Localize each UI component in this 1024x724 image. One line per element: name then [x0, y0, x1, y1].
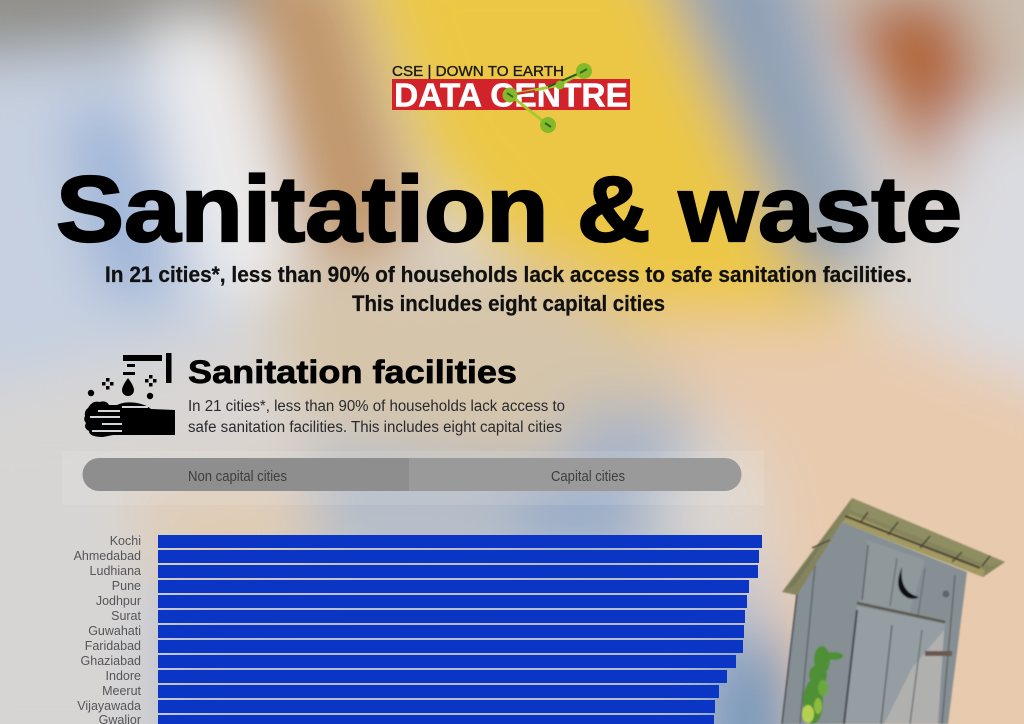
legend: capital cities: Capital cities: [551, 468, 625, 485]
legend: capital cities: [409, 458, 742, 491]
city labels: Ahmedabad: [74, 549, 141, 563]
section description: [188, 398, 565, 436]
bar chart: households with safe sanitation by city: [74, 534, 762, 724]
city labels: Meerut: [102, 684, 142, 698]
logo top line: CSE | DOWN TO EARTH: [392, 63, 564, 80]
knot holes: [942, 590, 950, 598]
logo red banner: [392, 79, 630, 110]
bars: [158, 535, 762, 724]
city labels: Guwahati: [88, 624, 141, 638]
legend: non capital cities: [82, 458, 409, 491]
title: Sanitation & waste: [56, 157, 962, 261]
illustration: wooden outhouse: [782, 498, 1005, 724]
upper wall lighter panels: [860, 540, 925, 612]
legend: non capital / capital toggle: [82, 458, 742, 491]
city labels: Kochi: [110, 534, 141, 548]
outhouse walls: [782, 522, 967, 724]
section description: In 21 cities*, less than 90% of households lack access to: [188, 398, 565, 415]
city labels: [74, 534, 142, 724]
city labels: Jodhpur: [96, 594, 141, 608]
city labels: Pune: [112, 579, 141, 593]
city labels: Ghaziabad: [81, 654, 141, 668]
city labels: Ludhiana: [90, 564, 141, 578]
subtitle: In 21 cities*, less than 90% of households lack access to safe sanitation facilities.: [105, 262, 912, 287]
moon cutout: [898, 567, 919, 599]
outhouse roof: [782, 498, 1005, 595]
plank lines: [782, 545, 955, 724]
city labels: Indore: [106, 669, 141, 683]
legend: non capital cities: Non capital cities: [188, 468, 287, 485]
logo banner text: DATA CENTRE: [394, 76, 628, 114]
logo network nodes: [502, 63, 592, 133]
outhouse door: [843, 606, 945, 724]
subtitle: [105, 262, 912, 316]
icon: hand washing under tap: [84, 353, 175, 437]
section heading: Sanitation facilities: Sanitation facilities: [188, 354, 517, 390]
faint legend panel: [62, 451, 764, 505]
logo: CSE Down To Earth Data Centre: [392, 63, 630, 133]
worn paint: [884, 630, 944, 724]
subtitle: This includes eight capital cities: [352, 291, 665, 316]
city labels: Faridabad: [85, 639, 141, 653]
city labels: Vijayawada: [77, 699, 141, 713]
door latch: [925, 651, 952, 656]
climbing plant: [802, 646, 843, 724]
city labels: Surat: [111, 609, 142, 623]
section description: safe sanitation facilities. This includes eight capital cities: [188, 419, 562, 436]
